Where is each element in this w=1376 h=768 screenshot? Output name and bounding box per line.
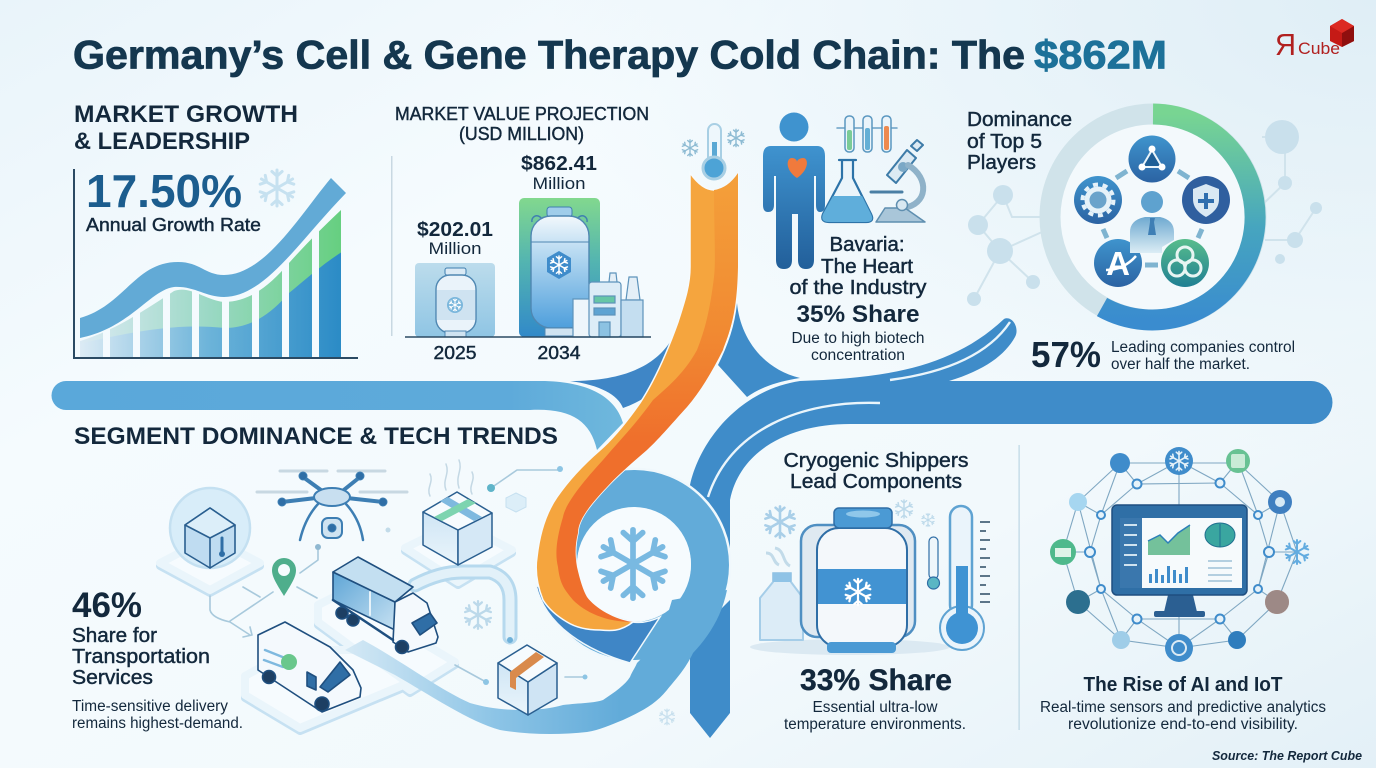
illustration: isometric logistics bbox=[160, 460, 727, 734]
icon: van bbox=[258, 622, 361, 712]
value labels: 2025 bbox=[434, 343, 476, 363]
stat: 46% transportation bbox=[72, 586, 243, 732]
icon: person with heart bbox=[763, 112, 825, 269]
value labels: Million bbox=[428, 239, 482, 258]
text: Bavaria: The Heart bbox=[821, 256, 913, 278]
network: AI and IoT bbox=[1050, 447, 1309, 662]
value labels bbox=[417, 152, 597, 363]
orb with cube bbox=[170, 488, 250, 568]
network nodes bbox=[1050, 447, 1309, 662]
text: Bavaria: concentration bbox=[811, 347, 905, 364]
chart title: (USD MILLION) bbox=[459, 123, 584, 144]
icon: snowflake bbox=[259, 170, 295, 206]
stat: 57% bbox=[1031, 334, 1295, 375]
value labels: $862.41 bbox=[521, 152, 597, 175]
company icons: A bbox=[1106, 245, 1130, 282]
icon: truck bbox=[333, 557, 438, 654]
chart title bbox=[395, 103, 649, 144]
text: rise of AI and IoT: revolutionize end-to-end visibility. bbox=[1068, 716, 1298, 733]
icon: lower box bbox=[498, 645, 557, 715]
text: rise of AI and IoT bbox=[1040, 673, 1326, 733]
network: background nodes bbox=[967, 120, 1322, 306]
stat: 46% transportation: Share for bbox=[72, 624, 157, 647]
text: Bavaria bbox=[790, 234, 926, 364]
icons: snowflakes and vapour bbox=[764, 500, 935, 566]
stat: 46% transportation: Time-sensitive delivery bbox=[72, 698, 228, 715]
connector lines bbox=[210, 470, 585, 682]
ribbon: orange bbox=[536, 173, 738, 631]
icon: faint snowflake bbox=[659, 709, 675, 725]
text: dominance of top 5 players: Players bbox=[967, 151, 1036, 174]
title: Germany’s Cell & Gene Therapy Cold Chain: The bbox=[73, 34, 1025, 78]
heading: market growth bbox=[74, 101, 298, 155]
company icons bbox=[1074, 136, 1230, 287]
ribbon: left horizontal bar bbox=[51, 342, 670, 450]
text: Bavaria: 35% Share bbox=[796, 301, 920, 328]
stat: 46% transportation: 46% bbox=[72, 586, 142, 625]
icon: top box bbox=[423, 492, 492, 565]
stat: 17.50% bbox=[86, 165, 261, 235]
stat: 17.50%: Annual Growth Rate bbox=[86, 215, 261, 235]
icon: central person bbox=[1130, 191, 1174, 253]
heading: market growth: & LEADERSHIP bbox=[74, 128, 250, 155]
icon: cryogenic shipper bbox=[750, 508, 950, 655]
icons: small snowflakes bbox=[464, 601, 492, 629]
text: dominance of top 5 players: Dominance bbox=[967, 108, 1072, 131]
bar 2025 bbox=[415, 263, 495, 337]
icon: drone bbox=[257, 471, 407, 540]
value labels: Million bbox=[532, 174, 586, 193]
icon: thermometer with snowflakes bbox=[682, 124, 745, 179]
stat: 46% transportation: remains highest-demand. bbox=[72, 715, 243, 732]
ribbon: right horizontal bar and flows bbox=[690, 303, 1332, 738]
source: Source: The Report Cube bbox=[1212, 749, 1362, 763]
platforms bbox=[160, 522, 512, 731]
title: $862M bbox=[1034, 34, 1167, 78]
road bbox=[345, 590, 727, 734]
logo: Я bbox=[1275, 27, 1296, 62]
stat: 46% transportation: Services bbox=[72, 666, 153, 689]
stat: 33% share: Essential ultra-low bbox=[812, 699, 938, 716]
heading: cryogenic shippers: Lead Components bbox=[790, 471, 962, 493]
heading: cryogenic shippers bbox=[784, 450, 968, 493]
donut: top 5 players bbox=[1050, 114, 1256, 320]
chart title: MARKET VALUE PROJECTION bbox=[395, 103, 649, 124]
value labels: 2034 bbox=[538, 343, 580, 363]
chart: growth area bbox=[74, 169, 358, 360]
icon: location pin bbox=[272, 558, 296, 596]
heading: market growth: MARKET GROWTH bbox=[74, 101, 298, 128]
icon: large snowflake bbox=[599, 530, 667, 598]
stat: 57%: over half the market. bbox=[1111, 356, 1250, 373]
stat: 33% share: temperature environments. bbox=[784, 716, 966, 733]
text: dominance of top 5 players bbox=[967, 108, 1072, 174]
text: Bavaria: of the Industry bbox=[790, 277, 926, 299]
road to top box bbox=[415, 572, 510, 637]
heading: cryogenic shippers: Cryogenic Shippers bbox=[784, 450, 968, 472]
icon: thermometers bbox=[928, 506, 990, 650]
stat: 57%: Leading companies control bbox=[1111, 339, 1295, 356]
icon: factory bbox=[573, 273, 643, 337]
stat: 46% transportation: Transportation bbox=[72, 645, 210, 668]
value labels: $202.01 bbox=[417, 218, 493, 241]
stat: 57%: 57% bbox=[1031, 334, 1101, 375]
stat: 33% share bbox=[784, 664, 966, 733]
ribbon: snowflake ring bbox=[536, 469, 730, 663]
icon: test tubes, flask, microscope bbox=[822, 116, 925, 222]
heading: segment dominance: SEGMENT DOMINANCE & TECH TRENDS bbox=[74, 423, 558, 450]
text: dominance of top 5 players: of Top 5 bbox=[967, 130, 1042, 153]
monitor bbox=[1112, 505, 1247, 617]
icon: small cube bbox=[506, 493, 526, 512]
stat: 33% share: 33% Share bbox=[800, 664, 952, 697]
logo: Cube bbox=[1298, 39, 1340, 58]
text: Bavaria: Due to high biotech bbox=[792, 330, 924, 347]
icon: steam bbox=[429, 460, 473, 496]
stat: 17.50%: 17.50% bbox=[86, 165, 242, 217]
bar 2034 bbox=[519, 198, 600, 337]
chart: market value projection bbox=[391, 103, 651, 363]
text: rise of AI and IoT: Real-time sensors and predictive analytics bbox=[1040, 699, 1326, 716]
logo bbox=[1275, 19, 1354, 62]
text: rise of AI and IoT: The Rise of AI and IoT bbox=[1084, 673, 1283, 696]
text: Bavaria: Bavaria: bbox=[830, 234, 904, 256]
